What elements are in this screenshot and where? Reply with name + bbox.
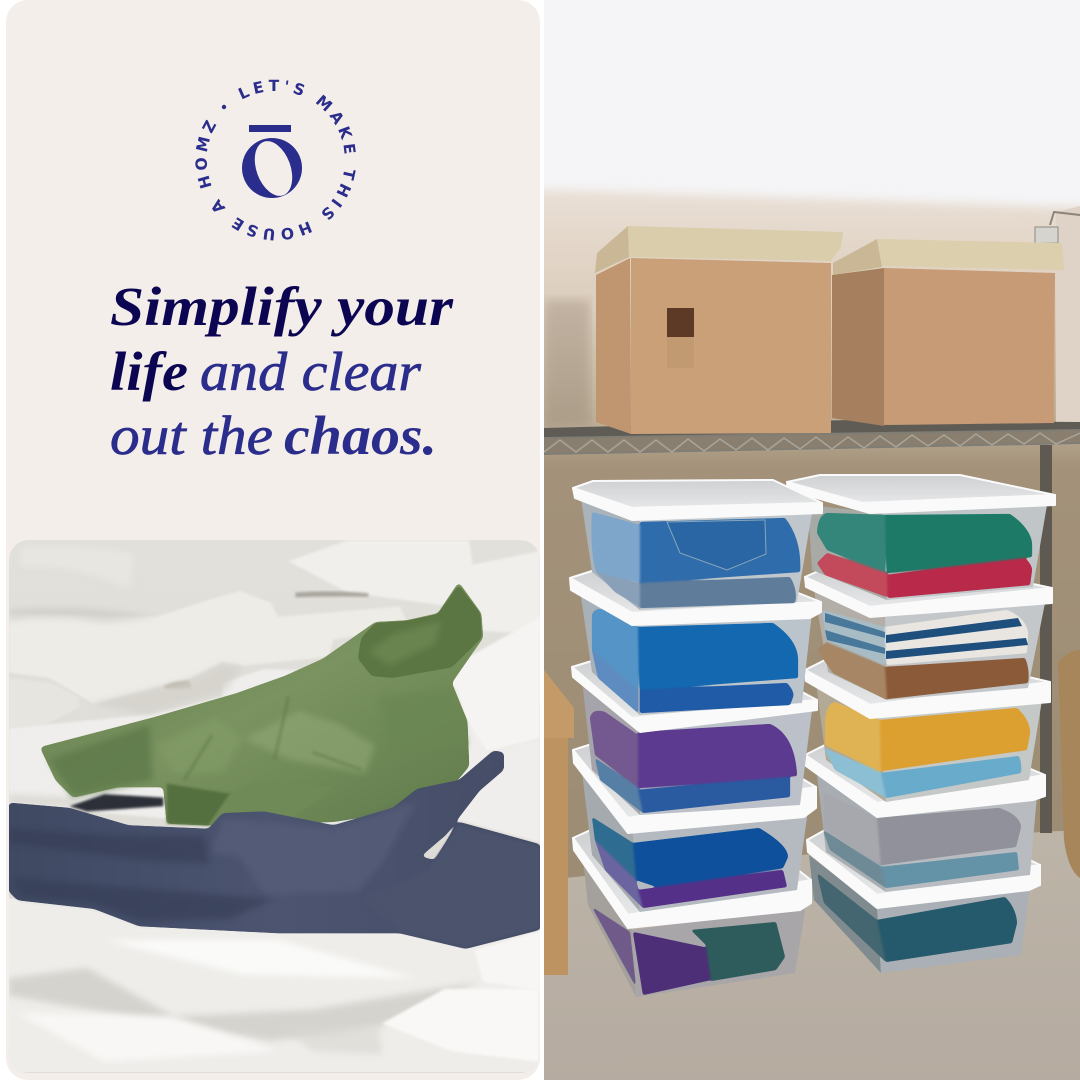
navy trousers [9, 751, 540, 949]
left column bottom bin: purple and teal [573, 828, 811, 997]
beige lower wall [530, 189, 1080, 900]
lid [572, 660, 817, 732]
right column bin 2: striped shirt and corduroy [805, 568, 1052, 700]
circular slogan text: LET'S MAKE THIS HOUSE A HOMZ [195, 80, 356, 240]
dark strap [70, 794, 163, 811]
heading: and clear [200, 341, 422, 402]
upper white wall [544, 0, 1080, 240]
heading: out the [110, 405, 273, 466]
folded clothes [823, 793, 1021, 888]
concrete floor [544, 830, 1080, 1080]
icon: slogan dot [222, 105, 226, 109]
pale shelf upright on right [1056, 206, 1080, 424]
lid [787, 475, 1055, 513]
lower white duvet [9, 898, 540, 1072]
cardboard box right on shelf [832, 239, 1064, 426]
left column bin 4: blue and purple [573, 743, 816, 912]
heading: life [110, 341, 188, 402]
right column bin 3: mustard and blue [805, 660, 1050, 802]
rumpled white sheets, upper [9, 540, 540, 843]
box lid [595, 226, 843, 273]
folded clothes [817, 873, 1017, 962]
lid [807, 830, 1040, 908]
lid [805, 745, 1045, 817]
folded clothes [824, 702, 1030, 798]
folded clothes [592, 907, 785, 995]
metal wire shelf [544, 420, 1080, 454]
folded clothes [590, 711, 797, 813]
photo: storage scene [530, 0, 1080, 1080]
folded clothes [592, 817, 788, 908]
left column top bin: denim [573, 480, 822, 610]
panel: left cream background [6, 0, 540, 1080]
heading: Simplify your [110, 276, 454, 337]
folded clothes [592, 609, 798, 713]
box cut-out handle [667, 308, 694, 337]
heading [110, 276, 454, 466]
folded clothes [817, 513, 1032, 598]
logo badge [195, 80, 356, 240]
photo: messy bed with clothes [9, 540, 540, 1073]
jeans pocket [667, 520, 766, 570]
shelf post [1040, 445, 1052, 833]
navy shirt stripes [825, 613, 1028, 659]
cardboard box lower left [544, 670, 574, 975]
green shirt [40, 582, 483, 825]
right column bin 4: grey and teal [805, 745, 1045, 892]
icon: logo bar [249, 125, 291, 132]
box lid [833, 239, 1064, 275]
folded clothes [592, 512, 800, 608]
wicker basket [1058, 650, 1080, 878]
lid [805, 660, 1050, 718]
icon: logo letter o [242, 136, 302, 201]
wire basket item [1035, 212, 1080, 243]
lid [570, 570, 821, 625]
lid [573, 480, 822, 520]
folded clothes [817, 610, 1029, 700]
right column top bin: green and red [787, 475, 1055, 600]
lid [805, 568, 1052, 617]
left column bin 2: bright blue [570, 570, 821, 715]
left column bin 3: purple and blue [572, 660, 817, 815]
cardboard box left on shelf [595, 226, 843, 434]
lid [573, 743, 816, 833]
heading: chaos. [284, 405, 437, 466]
lid [573, 828, 811, 928]
right column bottom bin: teal clothes [807, 830, 1040, 973]
